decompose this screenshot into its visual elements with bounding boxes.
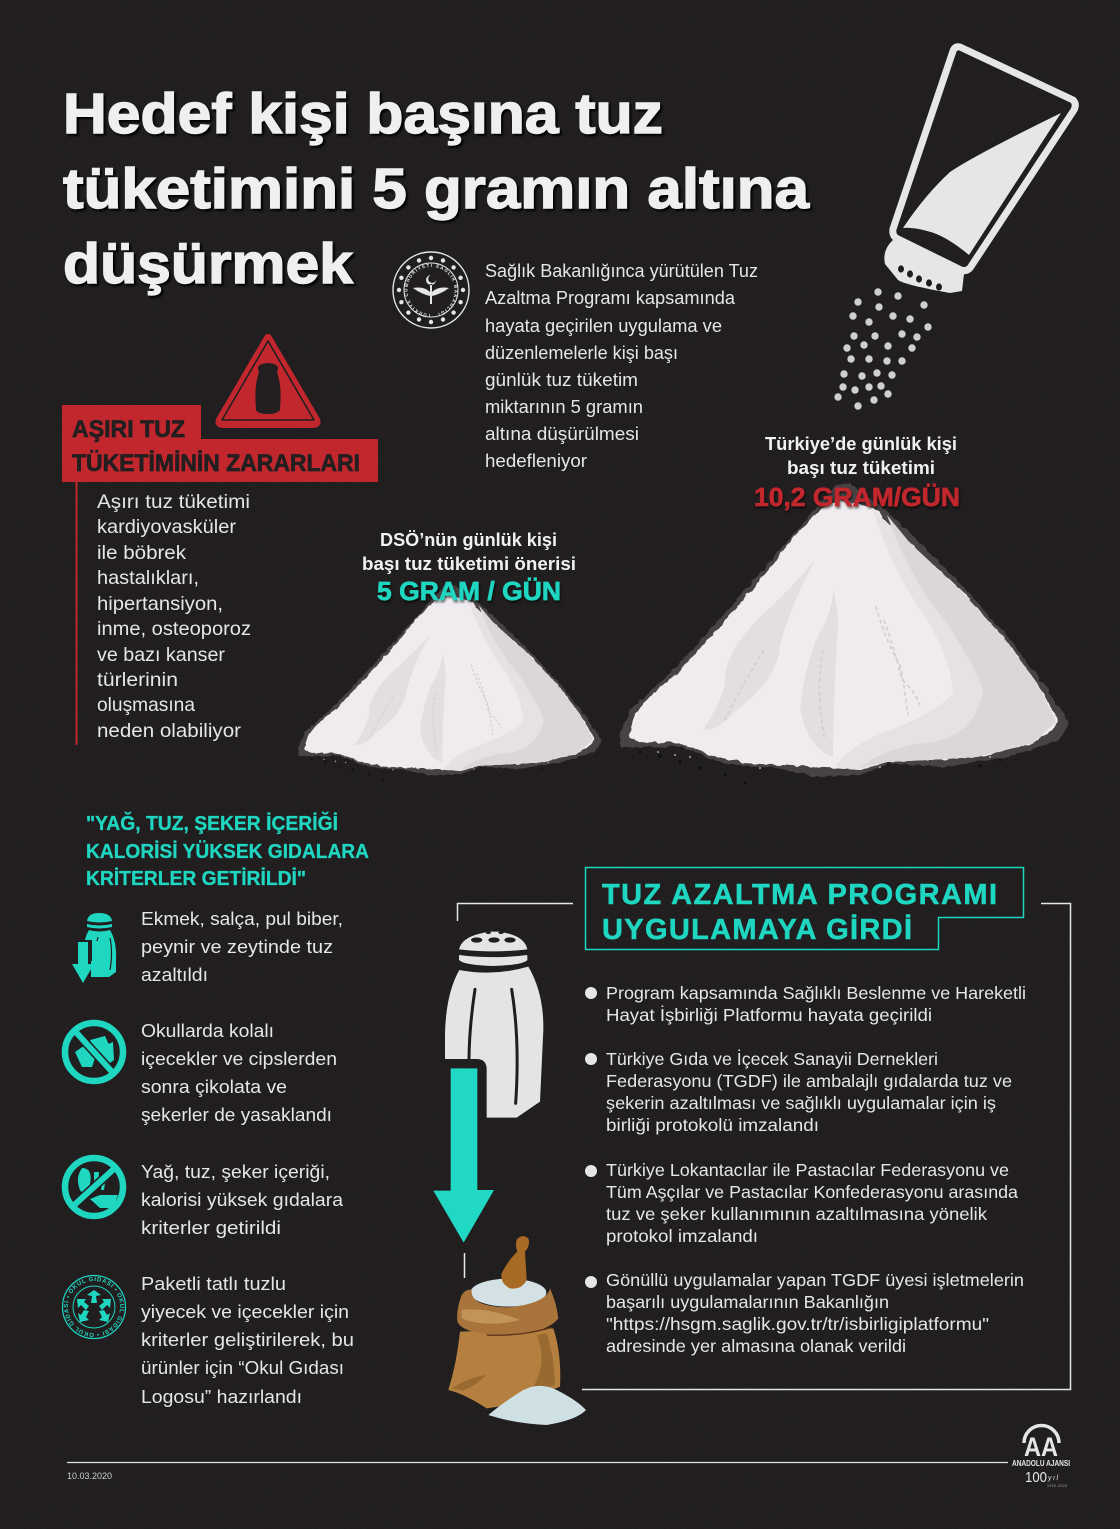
label: WHO recommendation: DSÖ’nün günlük kişi <box>380 530 557 550</box>
text block: school food logo: yiyecek ve içecekler için <box>141 1301 349 1322</box>
icon: banned snacks <box>65 1023 123 1081</box>
shaker <box>445 932 543 1118</box>
text block: program summary: günlük tuz tüketim <box>485 370 638 390</box>
logo: Anadolu Ajansi: AA <box>1024 1432 1058 1462</box>
label: Turkey daily consumption: 10,2 GRAM/GÜN <box>754 482 960 512</box>
text block: harms of excess salt: neden olabiliyor <box>97 720 242 742</box>
bullet list: program actions: "https://hsgm.saglik.gov.tr/tr/isbirligiplatformu" <box>606 1314 989 1334</box>
salt in sack <box>470 1279 546 1307</box>
bullet list: program actions: başarılı uygulamalarının Bakanlığın <box>606 1292 889 1312</box>
text block: program summary: altına düşürülmesi <box>485 424 639 444</box>
icon: tilted salt shaker with falling salt <box>834 47 1075 410</box>
icon: red warning triangle <box>220 338 316 424</box>
label: Turkey daily consumption <box>754 434 960 512</box>
bullet list: program actions: tuz ve şeker kullanımının azaltılmasına yönelik <box>606 1204 987 1224</box>
bullet list: program actions: protokol imzalandı <box>606 1226 758 1246</box>
heading: salt reduction program: TUZ AZALTMA PROGRAMI <box>602 879 997 911</box>
heading: criteria for foods: KRİTERLER GETİRİLDİ" <box>86 867 306 890</box>
text block: program summary: Sağlık Bakanlığınca yürütülen Tuz <box>485 261 758 281</box>
label: Turkey daily consumption: Türkiye’de günlük kişi <box>765 434 957 454</box>
text block: bread and condiments <box>141 908 343 985</box>
icon: teal shaker with down arrow <box>72 913 116 983</box>
teal arrow <box>433 1068 494 1243</box>
text block: school food logo: Paketli tatlı tuzlu <box>141 1273 286 1294</box>
text block: food criteria: kriterler getirildi <box>141 1217 281 1238</box>
text block: harms of excess salt: ile böbrek <box>97 542 186 564</box>
text block: program summary <box>485 261 758 471</box>
bullet list: program actions: Türkiye Gıda ve İçecek Sanayii Dernekleri <box>606 1049 938 1069</box>
text block: bread and condiments: peynir ve zeytinde tuz <box>141 936 333 957</box>
heading: salt reduction program: UYGULAMAYA GİRDİ <box>602 914 912 946</box>
text block: banned in schools: sonra çikolata ve <box>141 1076 287 1097</box>
logo: Anadolu Ajansi: 100 <box>1025 1469 1047 1486</box>
text block: harms of excess salt <box>76 482 251 745</box>
text block: program summary: düzenlemelerle kişi başı <box>485 343 678 363</box>
heading: criteria for foods <box>86 811 369 890</box>
heading: criteria for foods: "YAĞ, TUZ, ŞEKER İÇERİĞİ <box>86 811 338 835</box>
text block: program summary: hedefleniyor <box>485 451 587 471</box>
title <box>63 82 810 296</box>
text block: program summary: hayata geçirilen uygulama ve <box>485 316 722 336</box>
text block: banned in schools: içecekler ve cipslerden <box>141 1048 337 1069</box>
footer line and date: 10.03.2020 <box>67 1471 112 1481</box>
text block: banned in schools: şekerler de yasaklandı <box>141 1104 332 1125</box>
icon: banned fatty food <box>65 1158 123 1216</box>
bullet list: program actions: adresinde yer almasına olanak verildi <box>606 1336 906 1356</box>
sack neck <box>457 1288 558 1335</box>
text block: food criteria: Yağ, tuz, şeker içeriği, <box>141 1161 330 1182</box>
icon: school food logo: OKUL GIDASI • OKUL GIDASI • OKUL GIDASI • <box>64 1276 124 1338</box>
bullet list: program actions: Tüm Aşçılar ve Pastacılar Konfederasyonu arasında <box>606 1182 1018 1202</box>
logo: Anadolu Ajansi: 1920-2020 <box>1047 1484 1067 1488</box>
text block: bread and condiments: Ekmek, salça, pul biber, <box>141 908 343 929</box>
text block: program summary: miktarının 5 gramın <box>485 397 643 417</box>
text block: harms of excess salt: hipertansiyon, <box>97 593 223 615</box>
bullet list: program actions: Federasyonu (TGDF) ile ambalajlı gıdalarda tuz ve <box>606 1071 1012 1091</box>
text block: banned in schools: Okullarda kolalı <box>141 1020 274 1041</box>
frame around salt reduction program <box>458 904 1070 1390</box>
text block: bread and condiments: azaltıldı <box>141 964 208 985</box>
heading: salt reduction program <box>586 868 1024 950</box>
icon: ministry of health seal <box>392 251 470 329</box>
panel: harms of excess salt heading <box>62 405 378 482</box>
title: Hedef kişi başına tuz <box>63 82 663 146</box>
bullet list: program actions: Program kapsamında Sağlıklı Beslenme ve Hareketli <box>606 983 1026 1003</box>
text block: harms of excess salt: inme, osteoporoz <box>97 618 251 640</box>
icon: ministry of health seal: TÜRKİYE CUMHURİYETİ SAĞLIK BAKANLIĞI <box>404 264 458 318</box>
scoop <box>501 1236 529 1289</box>
text block: harms of excess salt: oluşmasına <box>97 694 195 716</box>
text block: school food logo: kriterler geliştirilerek, bu <box>141 1329 354 1350</box>
text block: banned in schools <box>141 1020 337 1125</box>
bullet list: program actions: birliği protokolü imzalandı <box>606 1115 819 1135</box>
label: WHO recommendation <box>362 530 576 606</box>
bullet list: program actions: şekerin azaltılması ve sağlıklı uygulamalar için iş <box>606 1093 996 1113</box>
text block: program summary: Azaltma Programı kapsamında <box>485 288 736 308</box>
text block: school food logo <box>141 1273 354 1407</box>
text block: harms of excess salt: hastalıkları, <box>97 567 199 589</box>
text block: food criteria <box>141 1161 344 1238</box>
logo: Anadolu Ajansi: yıl <box>1047 1475 1058 1482</box>
title: tüketimini 5 gramın altına <box>63 157 810 221</box>
label: WHO recommendation: 5 GRAM / GÜN <box>377 576 561 606</box>
text block: harms of excess salt: kardiyovasküler <box>97 516 237 538</box>
panel: harms of excess salt heading: AŞIRI TUZ <box>72 416 185 443</box>
logo: Anadolu Ajansi: ANADOLU AJANSI <box>1012 1458 1070 1468</box>
panel: harms of excess salt heading: TÜKETİMİNİN ZARARLARI <box>72 450 360 477</box>
illustration: large salt pile <box>620 483 1069 784</box>
text block: harms of excess salt: ve bazı kanser <box>97 644 225 666</box>
text block: harms of excess salt: Aşırı tuz tüketimi <box>97 491 250 513</box>
text block: food criteria: kalorisi yüksek gıdalara <box>141 1189 344 1210</box>
text block: harms of excess salt: türlerinin <box>97 669 178 691</box>
label: Turkey daily consumption: başı tuz tüketimi <box>787 458 935 478</box>
text block: school food logo: Logosu” hazırlandı <box>141 1386 302 1407</box>
illustration: large shaker, arrow and salt sack <box>433 931 586 1425</box>
illustration: small salt pile <box>298 584 602 780</box>
label: WHO recommendation: başı tuz tüketimi önerisi <box>362 554 576 574</box>
bullet list: program actions: Gönüllü uygulamalar yapan TGDF üyesi işletmelerin <box>606 1270 1024 1290</box>
title: düşürmek <box>63 232 353 296</box>
bullet list: program actions <box>585 983 1026 1356</box>
text block: school food logo: ürünler için “Okul Gıdası <box>141 1357 344 1378</box>
logo: Anadolu Ajansi <box>1012 1426 1070 1488</box>
bullet list: program actions: Hayat İşbirliği Platformu hayata geçirildi <box>606 1005 932 1025</box>
heading: criteria for foods: KALORİSİ YÜKSEK GIDALARA <box>86 840 369 863</box>
salt heap <box>488 1386 586 1425</box>
bullet list: program actions: Türkiye Lokantacılar ile Pastacılar Federasyonu ve <box>606 1160 1009 1180</box>
sack body <box>448 1328 560 1408</box>
